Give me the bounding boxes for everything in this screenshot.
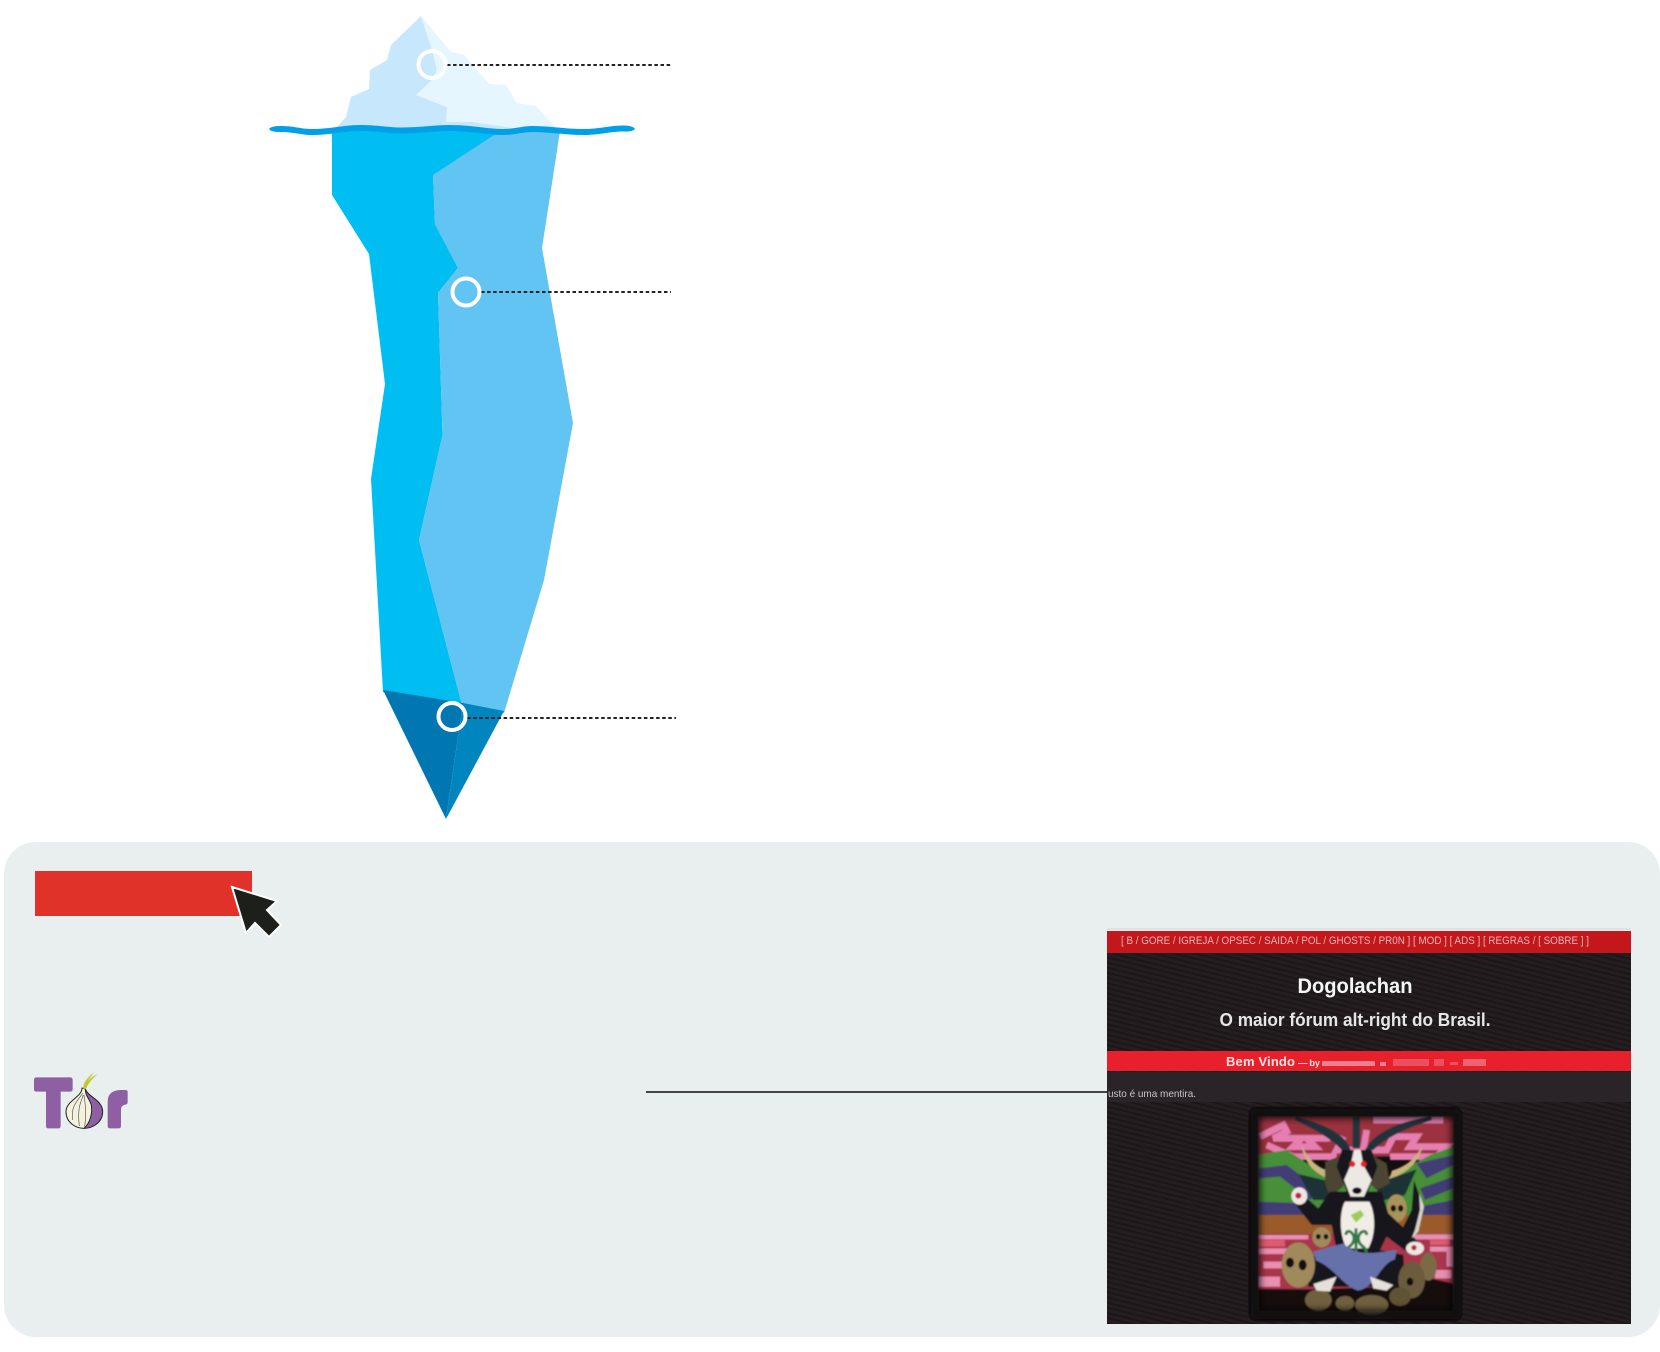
navigation bar	[1107, 931, 1631, 953]
art background: top band	[1258, 1117, 1453, 1157]
bottom mound	[1269, 1278, 1454, 1311]
forum image: goat demon on skulls	[1248, 1107, 1463, 1322]
art logotype	[1260, 1120, 1447, 1157]
top skull on right	[1387, 1194, 1407, 1222]
purple bands	[1258, 1155, 1453, 1215]
navigation bar: [ B / GORE / IGREJA / OPSEC / SAIDA / POL / GHOSTS / PR0N ] [ MOD ] [ ADS ] [ REGRAS / [ SOBRE ] ]	[1121, 935, 1589, 947]
iceberg middle: right face	[419, 131, 573, 713]
letter T	[34, 1077, 73, 1128]
iceberg tip: left face	[335, 16, 520, 133]
marker: tip	[418, 51, 671, 78]
water line	[269, 125, 635, 135]
wings	[1298, 1169, 1417, 1202]
icon: Tor logo	[34, 1072, 128, 1128]
screenshot: forum page	[1107, 928, 1631, 1324]
orange band	[1258, 1215, 1453, 1234]
pink bottom	[1258, 1234, 1453, 1289]
onion bulb left	[66, 1088, 92, 1128]
green hills	[1258, 1147, 1453, 1215]
iceberg base: left face	[383, 690, 463, 819]
welcome bar: Bem Vindo	[1226, 1054, 1295, 1069]
mane	[1325, 1155, 1390, 1197]
blue cloth	[1313, 1243, 1397, 1291]
feet	[1313, 1277, 1393, 1292]
iceberg base: right face	[446, 703, 504, 819]
iceberg	[332, 16, 573, 819]
icon: cursor arrow	[232, 887, 281, 937]
inner horns	[1295, 1116, 1432, 1150]
marker: base	[438, 703, 676, 730]
marker: middle	[452, 278, 671, 306]
red heading bar	[35, 871, 252, 916]
tail	[1402, 1180, 1420, 1237]
iceberg tip: right face	[416, 16, 556, 128]
welcome bar: — by	[1298, 1058, 1321, 1069]
serpent staff	[1346, 1228, 1367, 1254]
onion sprout	[83, 1072, 98, 1089]
letter r	[108, 1090, 128, 1128]
chest	[1341, 1202, 1374, 1248]
panel: dark web	[4, 842, 1660, 1337]
hands	[1291, 1187, 1307, 1205]
welcome bar	[1107, 1051, 1631, 1071]
onion bulb right	[84, 1089, 103, 1128]
chest crystal	[1351, 1210, 1364, 1223]
top hairline	[1107, 928, 1631, 930]
forum title: Dogolachan	[1298, 975, 1412, 998]
post text: usto é uma mentira.	[1108, 1088, 1196, 1100]
leader line	[646, 1091, 1108, 1093]
body and arms	[1293, 1192, 1420, 1287]
head	[1337, 1150, 1377, 1195]
iceberg middle: left face	[332, 131, 510, 705]
art vignette	[1255, 1113, 1457, 1315]
onion layers	[72, 1093, 86, 1127]
forum tagline: O maior fórum alt-right do Brasil.	[1220, 1010, 1490, 1030]
page background	[1107, 932, 1631, 1324]
skulls	[1282, 1227, 1437, 1315]
redacted name	[1322, 1059, 1486, 1066]
post strip	[1107, 1072, 1631, 1102]
outer horns	[1302, 1145, 1423, 1180]
